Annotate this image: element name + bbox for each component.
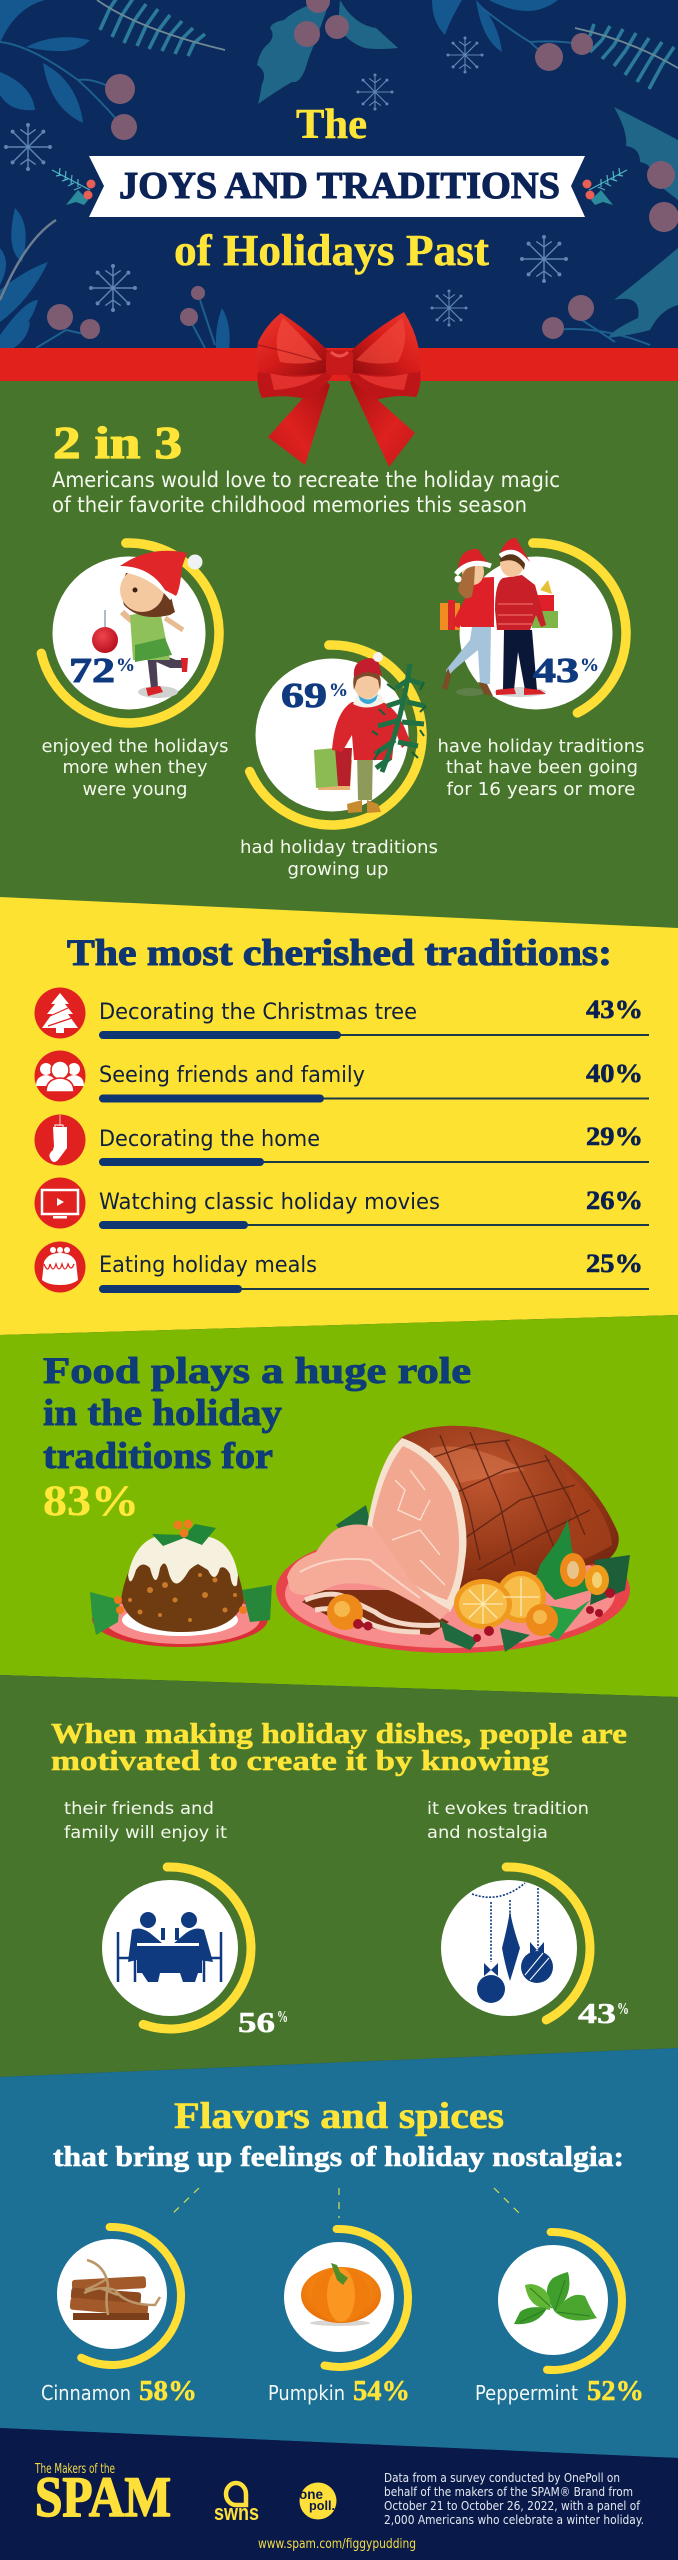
row: decorating the home: Decorating the home bbox=[99, 1126, 320, 1152]
icon: left sprig bbox=[52, 168, 96, 205]
row: decorating the home bbox=[34, 1114, 649, 1166]
caption: 69%: had holiday traditions bbox=[240, 837, 438, 858]
header foliage decoration bbox=[0, 0, 678, 349]
icon: mint leaves bbox=[514, 2272, 597, 2324]
heading: flavors and spices: Flavors and spices bbox=[174, 2096, 504, 2137]
row: holiday meals: 25% bbox=[586, 1249, 643, 1278]
caption: 43%: that have been going bbox=[446, 757, 638, 778]
caption: 72% bbox=[42, 736, 228, 800]
row: holiday movies: Watching classic holiday movies bbox=[99, 1189, 440, 1215]
stat value: 72 bbox=[69, 651, 115, 690]
heading: When making holiday dishes, people are bbox=[51, 1718, 627, 1750]
caption: 43% bbox=[438, 736, 644, 800]
stat value: 69 bbox=[281, 676, 327, 715]
flavor circle: peppermint bbox=[482, 2230, 624, 2372]
caption: 43%: have holiday traditions bbox=[438, 736, 644, 757]
panel: motivation for holiday dishes bbox=[0, 1675, 678, 2077]
row: decorating the home: 29% bbox=[586, 1122, 643, 1151]
icon: red bow bbox=[256, 312, 420, 467]
stat value bbox=[69, 651, 135, 690]
row: friends and family bbox=[34, 1050, 649, 1102]
icon: people bbox=[34, 1050, 86, 1102]
label: cinnamon bbox=[41, 2375, 197, 2407]
caption: 69% bbox=[240, 837, 438, 880]
icon: pumpkin bbox=[301, 2263, 381, 2326]
logo: SPAM brand: The Makers of the bbox=[34, 2462, 115, 2477]
survey methodology note: behalf of the makers of the SPAM® Brand from bbox=[384, 2484, 633, 2499]
label: peppermint: 52% bbox=[587, 2375, 644, 2407]
stat value: % bbox=[116, 655, 135, 676]
caption: tradition and nostalgia bbox=[427, 1799, 589, 1843]
survey methodology note bbox=[384, 2470, 644, 2527]
caption: 72%: more when they bbox=[62, 757, 208, 778]
illustration: glazed ham bbox=[276, 1426, 630, 1653]
stat value: % bbox=[580, 655, 599, 676]
heading: Food plays a huge role bbox=[43, 1351, 471, 1392]
banner title text: JOYS AND TRADITIONS bbox=[119, 165, 560, 207]
icon: holiday couple with gifts bbox=[440, 538, 558, 697]
panel: food plays a huge role bbox=[0, 1315, 678, 1697]
panel: most cherished traditions bbox=[0, 897, 678, 1335]
caption: 43%: for 16 years or more bbox=[446, 779, 636, 800]
heading bbox=[51, 1718, 627, 1777]
label: pumpkin: Pumpkin bbox=[268, 2381, 345, 2405]
label: cinnamon: 58% bbox=[139, 2375, 197, 2407]
stat circle: 43% bbox=[425, 1864, 629, 2032]
panel: green intro background bbox=[0, 381, 678, 930]
panel: flavors and spices bbox=[0, 2048, 678, 2458]
intro text bbox=[52, 468, 560, 517]
stat circle: 43% bbox=[440, 538, 629, 726]
icon: cinnamon sticks bbox=[70, 2260, 160, 2320]
logo: onepoll bbox=[299, 2482, 336, 2520]
heading bbox=[43, 1351, 471, 1477]
icon: pudding bbox=[34, 1242, 86, 1292]
title: The: The bbox=[296, 102, 367, 148]
title: of Holidays Past: of Holidays Past bbox=[174, 226, 489, 275]
panel: header background bbox=[0, 0, 678, 349]
heading: The most cherished traditions: bbox=[67, 933, 612, 974]
website url: www.spam.com/figgypudding bbox=[258, 2536, 416, 2552]
illustration: christmas pudding bbox=[90, 1520, 272, 1647]
icon: tree bbox=[34, 988, 86, 1038]
icon: hanging ornaments bbox=[472, 1883, 553, 2003]
stat value: % bbox=[329, 680, 348, 701]
snowflakes bbox=[4, 36, 568, 327]
caption: tradition and nostalgia: it evokes tradition bbox=[427, 1799, 589, 1819]
icon: right sprig bbox=[582, 168, 627, 205]
stat circle: 69% bbox=[239, 642, 426, 828]
label: peppermint bbox=[475, 2375, 644, 2407]
percent sign: % bbox=[617, 1999, 629, 2018]
row: holiday meals bbox=[34, 1242, 649, 1293]
caption: 72%: enjoyed the holidays bbox=[42, 736, 228, 757]
logo: swns bbox=[214, 2483, 259, 2525]
heading: traditions for bbox=[43, 1436, 273, 1477]
caption: 72%: were young bbox=[82, 779, 188, 800]
survey methodology note: Data from a survey conducted by OnePoll on bbox=[384, 2470, 620, 2485]
stat: 2 in 3: 2 in 3 bbox=[53, 417, 182, 468]
logo: onepoll: one bbox=[299, 2486, 323, 2502]
row: holiday movies: 26% bbox=[586, 1186, 643, 1215]
row: friends and family: 40% bbox=[586, 1059, 643, 1088]
caption: friends and family bbox=[64, 1799, 227, 1843]
stat value: 43 bbox=[533, 651, 579, 690]
survey methodology note: October 21 to October 26, 2022, with a panel of bbox=[384, 2498, 641, 2513]
caption: 69%: growing up bbox=[288, 859, 388, 880]
icon: stocking bbox=[34, 1114, 86, 1166]
flavor circle: pumpkin bbox=[268, 2227, 410, 2369]
caption: friends and family: their friends and bbox=[64, 1799, 214, 1819]
red ribbon band bbox=[0, 348, 678, 381]
intro text: of their favorite childhood memories this season bbox=[52, 493, 527, 517]
icon: woman with tree and bags bbox=[314, 652, 426, 813]
icon: girl with ornament bbox=[92, 551, 202, 698]
logo: swns: swns bbox=[214, 2500, 259, 2525]
row: Christmas tree: Decorating the Christmas tree bbox=[99, 999, 417, 1025]
stat value bbox=[533, 651, 599, 690]
label: cinnamon: Cinnamon bbox=[41, 2381, 131, 2405]
label: pumpkin bbox=[268, 2375, 410, 2407]
dashed pointers bbox=[169, 2188, 523, 2218]
panel: footer bbox=[0, 2428, 678, 2560]
stat circle: 72% bbox=[36, 540, 222, 726]
row: friends and family: Seeing friends and family bbox=[99, 1062, 365, 1088]
heading: motivated to create it by knowing bbox=[51, 1745, 550, 1777]
stat value: 43 bbox=[578, 1999, 616, 2030]
icon: people dining bbox=[118, 1912, 221, 1982]
label: pumpkin: 54% bbox=[353, 2375, 410, 2407]
row: Christmas tree bbox=[34, 988, 649, 1039]
label: peppermint: Peppermint bbox=[475, 2381, 578, 2405]
title banner bbox=[89, 156, 585, 217]
row: holiday meals: Eating holiday meals bbox=[99, 1252, 317, 1278]
heading: in the holiday bbox=[43, 1393, 283, 1434]
icon: monitor bbox=[34, 1178, 86, 1228]
stat value bbox=[281, 676, 348, 715]
logo: SPAM brand: SPAM bbox=[35, 2466, 171, 2529]
stat circle: 56% bbox=[86, 1864, 288, 2039]
stat value: 56 bbox=[238, 2008, 275, 2039]
subheading: that bring up feelings of holiday nostalgia: bbox=[53, 2142, 624, 2173]
intro text: Americans would love to recreate the holiday magic bbox=[52, 468, 560, 492]
row: holiday movies bbox=[34, 1178, 649, 1229]
row: Christmas tree: 43% bbox=[586, 995, 643, 1024]
caption: tradition and nostalgia: and nostalgia bbox=[427, 1823, 548, 1843]
flavor circle: cinnamon bbox=[41, 2225, 183, 2367]
caption: friends and family: family will enjoy it bbox=[64, 1823, 227, 1843]
stat: 83%: 83% bbox=[43, 1478, 139, 1525]
percent sign: % bbox=[277, 2007, 288, 2026]
logo: onepoll: poll. bbox=[309, 2498, 335, 2513]
